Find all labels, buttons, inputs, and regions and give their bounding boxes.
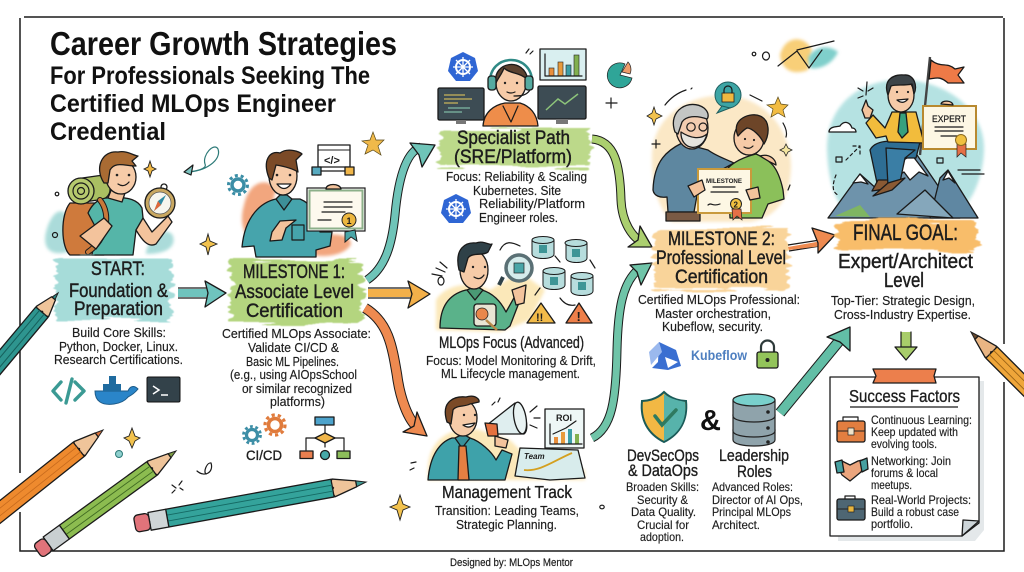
pointing hand: [270, 220, 296, 241]
devsecops body: Crucial for: [637, 518, 689, 532]
MLOps focus body: ML Lifecycle management.: [441, 366, 580, 381]
code window: [318, 145, 350, 167]
specialist body text: Reliability/Platform: [479, 196, 585, 211]
networking text: meetups.: [871, 478, 912, 492]
shirt: [88, 198, 144, 255]
panel: success factors note: [830, 369, 984, 541]
certificate: [923, 106, 976, 149]
illustration: specialist at monitors: [438, 49, 632, 126]
speech bubble lock: [715, 82, 741, 108]
leadership body: Director of AI Ops,: [712, 493, 803, 507]
arrow: final goal down to success factors: [895, 332, 917, 360]
chart card: [540, 49, 586, 80]
star + sparkles: [767, 97, 788, 117]
milestone 2 body: Master orchestration,: [655, 306, 771, 321]
milestone 2 banner: MILESTONE 2:: [668, 229, 775, 250]
devsecops body: adoption.: [640, 530, 684, 544]
illustration: milestone 1 graduate: </>: [324, 155, 340, 167]
milestone 2 body: [638, 292, 800, 334]
ROI card: [545, 409, 584, 448]
start banner: [56, 258, 172, 320]
mentor head: [676, 107, 708, 149]
leadership body: [712, 480, 803, 532]
leadership heading: Leadership: [719, 447, 789, 465]
ampersand: &: [700, 405, 721, 437]
icon: handshake: [835, 458, 868, 481]
continuous learning text: Keep updated with: [871, 425, 958, 439]
head: [888, 78, 914, 112]
legs: [870, 141, 920, 183]
icon: terminal: [147, 377, 180, 402]
compass: [161, 184, 167, 190]
illustration: mentor and mentee: [647, 39, 838, 222]
leadership body: Advanced Roles:: [712, 480, 793, 494]
head: [449, 400, 477, 436]
icon: database: [733, 394, 775, 446]
devsecops body: Broaden Skills:: [626, 480, 699, 494]
specialist body text: [446, 169, 587, 225]
final goal banner: [837, 220, 978, 250]
magnifier: [499, 277, 503, 285]
warning triangles: [527, 303, 555, 323]
devsecops heading: & DataOps: [628, 462, 698, 480]
head: [108, 188, 126, 202]
milestone 2 banner: [654, 229, 788, 291]
shirt: [242, 199, 332, 257]
arrow: milestone 1 to management: [365, 308, 427, 436]
devsecops body: [626, 480, 699, 544]
start body text: Research Certifications.: [54, 352, 183, 367]
head: [460, 251, 488, 289]
old mentor shirt: [653, 143, 734, 212]
start body text: [54, 325, 183, 367]
milestone 1 body text: Validate CI/CD &: [248, 340, 339, 355]
milestone 1 body text: (e.g., using AIOpsSchool: [230, 367, 357, 382]
devsecops heading: [627, 447, 699, 480]
leadership heading: Roles: [737, 463, 772, 481]
milestone 1 body text: Basic ML Pipelines.: [246, 354, 339, 369]
certificate: [307, 188, 365, 231]
arrow: milestone 1 to specialist path: [367, 143, 435, 280]
mentee head: [734, 121, 764, 155]
icon: docker whale: [95, 376, 138, 404]
icon: CI/CD gears: CI/CD: [246, 447, 282, 463]
icon: shield: [642, 392, 686, 442]
pie chart: [607, 63, 632, 88]
success factors title: Success Factors: [849, 386, 960, 406]
arrow: milestone 1 to MLOps focus: [368, 281, 430, 308]
milestone 2 banner: Certification: [675, 267, 768, 288]
milestone 1 banner: MILESTONE 1:: [243, 262, 345, 283]
real-world projects text: Build a robust case: [871, 505, 959, 519]
title: For Professionals Seeking The: [50, 62, 370, 90]
real-world projects text: [871, 493, 971, 531]
milestone 1 banner: Certification: [246, 301, 343, 322]
mug: [474, 304, 496, 326]
networking text: [871, 454, 951, 492]
decorative doodle arrow: [184, 147, 219, 175]
star: [362, 132, 384, 155]
illustration: milestone 1 graduate: 1: [346, 216, 352, 226]
specialist banner: [440, 128, 590, 168]
pencil: green: [33, 444, 181, 558]
start banner: Foundation &: [69, 281, 168, 302]
icon: kubernetes small: [441, 194, 471, 223]
milestone 2 body: Kubeflow, security.: [662, 319, 763, 334]
arrow: start to milestone 1: [178, 281, 226, 307]
kubernetes badge: [448, 52, 478, 81]
pencil: orange right: [965, 326, 1024, 408]
continuous learning text: [871, 413, 972, 451]
shirt: [428, 438, 512, 480]
shirt: [440, 290, 520, 330]
start banner: Preparation: [74, 299, 163, 320]
management body: [435, 503, 579, 532]
real-world projects text: Real-World Projects:: [871, 493, 971, 507]
final goal body: [831, 293, 975, 322]
final goal heading: Expert/Architect: [838, 251, 973, 273]
icon: pipeline flow chart: [300, 417, 350, 460]
real-world projects text: portfolio.: [871, 517, 913, 531]
final goal heading: [838, 251, 973, 292]
devsecops body: Security &: [637, 493, 688, 507]
title: Career Growth Strategies: [50, 25, 397, 62]
milestone 1 body text: platforms): [270, 394, 325, 409]
devsecops body: Data Quality.: [631, 505, 696, 519]
milestone 1 banner: Associate Level: [235, 282, 354, 303]
specialist body text: Engineer roles.: [479, 210, 558, 225]
illustration: MLOps focus: !!: [536, 312, 543, 324]
icon: padlock: [757, 340, 778, 368]
doodles: [829, 122, 856, 132]
illustration: MLOps focus: !: [576, 309, 581, 324]
backpack: [63, 203, 112, 255]
MLOps focus title: MLOps Focus (Advanced): [439, 334, 584, 352]
bedroll: [68, 174, 111, 204]
illustration: management track: [428, 396, 585, 480]
specialist banner: Specialist Path: [457, 128, 570, 149]
milestone 2 banner: Professional Level: [656, 248, 786, 269]
illustration: MLOps focus: [432, 236, 595, 332]
management body: Transition: Leading Teams,: [435, 503, 579, 518]
networking text: Networking: Join: [871, 454, 951, 468]
mountains: [828, 152, 960, 218]
specialist body text: Kubernetes. Site: [473, 183, 561, 198]
head: [496, 65, 526, 101]
leadership body: Principal MLOps: [712, 505, 791, 519]
torso: [866, 112, 924, 143]
milestone 1 body text: or similar recognized: [242, 381, 352, 396]
final goal body: Top-Tier: Strategic Design,: [831, 293, 975, 308]
illustration: final goal on summit: EXPERT: [932, 114, 966, 125]
certificate: [698, 169, 751, 213]
icon: toolbox: [837, 417, 865, 442]
milestone 2 body: Certified MLOps Professional:: [638, 292, 800, 307]
final goal heading: Level: [884, 270, 924, 292]
flag: [920, 57, 930, 155]
megaphone: [487, 403, 527, 434]
milestone 1 body text: [222, 326, 371, 409]
continuous learning text: Continuous Learning:: [871, 413, 972, 427]
illustration: final goal on summit: [827, 57, 984, 218]
icon: CI/CD gears: [244, 415, 285, 463]
arrow: specialist to milestone 2: [592, 139, 652, 247]
right monitor: [538, 86, 586, 119]
icon: briefcase: [837, 496, 865, 520]
illustration: milestone 1 graduate: [200, 132, 384, 257]
sparkles and small doodles: [116, 428, 604, 520]
illustration: management track: ROI: [556, 413, 572, 423]
icon: kubeflow logo: Kubeflow: [691, 347, 747, 363]
start body text: Build Core Skills:: [72, 325, 166, 340]
pencil: teal long: [133, 473, 368, 533]
management body: Strategic Planning.: [456, 517, 557, 532]
illustration: start hiker: [45, 152, 175, 255]
map: [515, 448, 585, 480]
title: [50, 25, 397, 146]
illustration: mentor and mentee: MILESTONE: [706, 178, 743, 185]
pencil: teal top-left: [0, 288, 64, 386]
mentee shirt: [728, 154, 784, 218]
arrow: leadership to final goal: [780, 327, 850, 413]
MLOps focus body: [426, 353, 596, 381]
arrow: management to milestone 2: [592, 263, 652, 438]
start banner: START:: [91, 259, 145, 280]
head: [269, 157, 297, 195]
leadership heading: [719, 447, 789, 481]
start body text: Python, Docker, Linux.: [59, 339, 178, 354]
tape: [873, 369, 936, 383]
mountain doodle: [780, 39, 812, 72]
networking text: forums & local: [871, 466, 938, 480]
sparkle: [144, 161, 156, 177]
icon: code: [53, 379, 84, 403]
MLOps focus body: Focus: Model Monitoring & Drift,: [426, 353, 596, 368]
footer credit: Designed by: MLOps Mentor: [450, 557, 573, 569]
illustration: management track: Team: [524, 452, 545, 461]
gear: [228, 176, 248, 194]
specialist body text: Focus: Reliability & Scaling: [446, 169, 587, 184]
arm and compass hand: [136, 216, 172, 245]
shirt: [483, 103, 538, 126]
left monitor: [438, 88, 484, 120]
final goal banner: FINAL GOAL:: [853, 220, 958, 245]
title: Certified MLOps Engineer: [50, 90, 336, 118]
specialist banner: (SRE/Platform): [454, 147, 572, 168]
arrow: milestone 2 to final goal: [788, 228, 835, 253]
illustration: mentor and mentee: 2: [734, 200, 738, 210]
devsecops heading: DevSecOps: [627, 447, 699, 465]
pencil: orange: [0, 423, 109, 534]
milestone 1 banner: [231, 260, 362, 323]
title: Credential: [50, 118, 166, 146]
milestone 1 body text: Certified MLOps Associate:: [222, 326, 371, 341]
icon: kubeflow logo: [649, 342, 747, 370]
data cylinders: [532, 236, 593, 296]
leadership body: Architect.: [712, 518, 760, 532]
final goal body: Cross-Industry Expertise.: [834, 307, 971, 322]
continuous learning text: evolving tools.: [871, 437, 937, 451]
management title: Management Track: [442, 482, 572, 502]
